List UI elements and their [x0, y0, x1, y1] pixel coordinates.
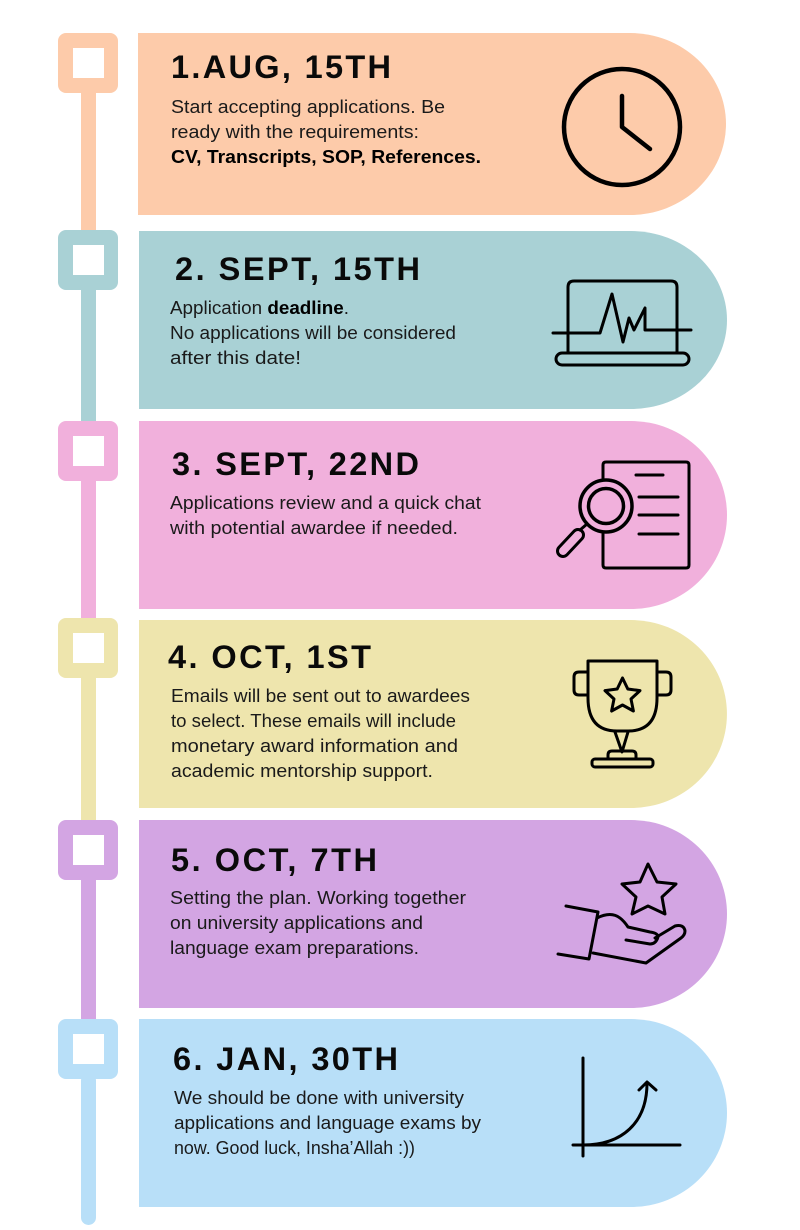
timeline node 3 [58, 421, 118, 620]
text: step 4 description: to select. These emails will include [171, 711, 456, 731]
panel: step 4 [139, 620, 727, 808]
panel: step 5 [139, 820, 727, 1008]
text: step 5 description [170, 888, 466, 958]
text: step 4 description: monetary award information and [171, 736, 458, 756]
text: step 5 description: on university applications and [170, 913, 423, 933]
icon: trophy with star [574, 661, 671, 767]
heading: step 2: 2. SEPT, 15TH [175, 251, 420, 287]
icon: clock [564, 69, 680, 185]
text: step 1 description: CV, Transcripts, SOP, References. [171, 147, 481, 167]
timeline node 6 [58, 1019, 118, 1225]
text: step 3 description [169, 493, 481, 538]
text: step 1 description [171, 97, 481, 167]
text: step 4 description [171, 686, 470, 781]
panel: step 6 [139, 1019, 727, 1207]
icon: laptop with pulse [553, 281, 691, 365]
panel: step 3 [139, 421, 727, 609]
timeline node 5 [58, 820, 118, 1021]
heading: step 6: 6. JAN, 30TH [173, 1041, 398, 1077]
text: step 2 description: after this date! [170, 348, 301, 368]
text: step 6 description [174, 1088, 481, 1158]
text: step 1 description: Start accepting applications. Be [171, 97, 445, 117]
icon: document with magnifier [563, 462, 689, 568]
heading: step 1: 1.AUG, 15TH [171, 49, 391, 85]
text: step 6 description: applications and language exams by [174, 1113, 481, 1133]
text: step 1 description: ready with the requirements: [171, 122, 419, 142]
heading: step 5: 5. OCT, 7TH [171, 842, 377, 878]
text: step 4 description: Emails will be sent out to awardees [171, 686, 470, 706]
text: step 3 description: Applications review and a quick chat [170, 493, 481, 513]
heading: step 3: 3. SEPT, 22ND [172, 446, 419, 482]
icon: growth chart [573, 1058, 680, 1156]
text: step 4 description: academic mentorship support. [171, 761, 433, 781]
timeline rail [58, 33, 118, 1225]
text: step 2 description: Application deadline. [170, 298, 349, 318]
text: step 5 description: Setting the plan. Working together [170, 888, 466, 908]
text: step 6 description: now. Good luck, Insha’Allah :)) [174, 1138, 415, 1158]
text: step 2 description: No applications will be considered [170, 323, 456, 343]
timeline node 2 [58, 230, 118, 423]
panel: step 1 [138, 33, 726, 215]
timeline node 1 [58, 33, 118, 233]
panel: step 2 [139, 231, 727, 409]
text: step 6 description: We should be done with university [174, 1088, 464, 1108]
text: step 5 description: language exam preparations. [170, 938, 419, 958]
timeline node 4 [58, 618, 118, 822]
text: step 2 description [170, 298, 456, 368]
text: step 3 description: with potential awardee if needed. [169, 518, 458, 538]
heading: step 4: 4. OCT, 1ST [168, 639, 371, 675]
icon: hand holding star [558, 864, 685, 963]
